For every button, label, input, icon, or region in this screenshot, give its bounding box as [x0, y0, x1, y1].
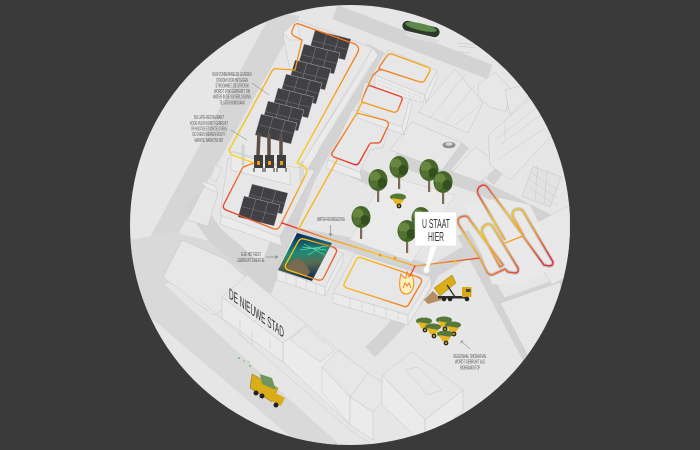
three wood stoves with chimneys — [242, 133, 303, 182]
callout: U staat hier — [415, 212, 456, 273]
comb-shaped pavilion — [458, 185, 562, 285]
buildings: office row — [326, 50, 437, 180]
icon: single wheelbarrow — [390, 194, 406, 208]
annotation: regional pruning waste: REGIONAAL SNOEIAFVAL — [454, 354, 487, 360]
trees — [352, 156, 452, 253]
site map infographic — [130, 5, 570, 445]
annotation: water purification: WATER-REINIGEDING — [317, 217, 345, 223]
building: lower hall — [220, 152, 315, 246]
icon: car — [442, 142, 456, 148]
annotation: party energy: ELEK HET FEEST — [241, 252, 261, 258]
annotation: restaurant stoves: DE OVENS WERKEN RECHT- — [192, 132, 226, 138]
annotation: restaurant stoves — [190, 115, 247, 144]
solar panels: main array — [255, 30, 351, 144]
annotation: restaurant stoves: KOOK-VUUR WORDT GEBRUIKT — [190, 121, 228, 127]
building: De Nieuwe Stad — [200, 275, 393, 450]
annotation: solar panels: WATER IN DE VIJVERLOSSING — [213, 94, 251, 100]
callout: U staat hier: HIER — [428, 229, 444, 244]
annotation: party energy — [238, 252, 278, 262]
left truck-shaped building — [187, 165, 222, 226]
annotation: party energy: GEBRUIKT ENERGIE — [238, 258, 265, 264]
icon: dump truck at hall — [424, 275, 472, 304]
building: long solar roof hall — [228, 20, 378, 178]
solar panels: small array — [238, 184, 288, 226]
building: fire hall — [333, 253, 431, 325]
building title: De Nieuwe Stad: DE NIEUWE STAD — [229, 285, 284, 342]
annotation: regional pruning waste: BIOBRANDSTOF — [460, 366, 480, 372]
heat screen image — [278, 233, 332, 281]
annotation: regional pruning waste: WORDT GEBRUIKT ALS — [455, 360, 485, 366]
annotation: restaurant stoves: OP HOUTGESTOOKTE OVENS — [191, 126, 227, 132]
annotation: regional pruning waste — [454, 341, 487, 372]
callout: U staat hier: U STAAT — [422, 216, 450, 231]
annotation: solar panels: TE LATEN RONDGAAN — [220, 100, 245, 106]
ground blocks — [163, 122, 570, 360]
annotation: restaurant stoves: WARMTE, WARM ONS HET — [194, 138, 224, 144]
icon: truck with greens — [238, 357, 285, 408]
annotation: solar panels: STROOMNET. DE STROOM — [216, 84, 248, 90]
annotation: solar panels — [212, 72, 269, 106]
icon: boat with greens — [401, 20, 478, 53]
building: lower right block — [382, 352, 463, 445]
roads — [130, 12, 570, 445]
heat network lines — [223, 24, 553, 307]
buildings: industrial halls — [418, 69, 561, 207]
annotation: water purification — [317, 217, 345, 236]
icon: flame — [400, 272, 414, 294]
screen building — [277, 232, 343, 296]
annotation: restaurant stoves: BIJ LATE-RESTAURANT — [194, 115, 224, 121]
annotation: solar panels: WORDT OOK GEBRUIKT OM — [214, 89, 250, 95]
annotation: solar panels: STROOM VOOR HET EIGEN — [216, 78, 248, 84]
annotation: solar panels: RUW ZONNEPANELEN LEVEREN — [212, 72, 252, 78]
icon: group of wheelbarrows — [416, 316, 461, 345]
map disc — [130, 5, 570, 450]
